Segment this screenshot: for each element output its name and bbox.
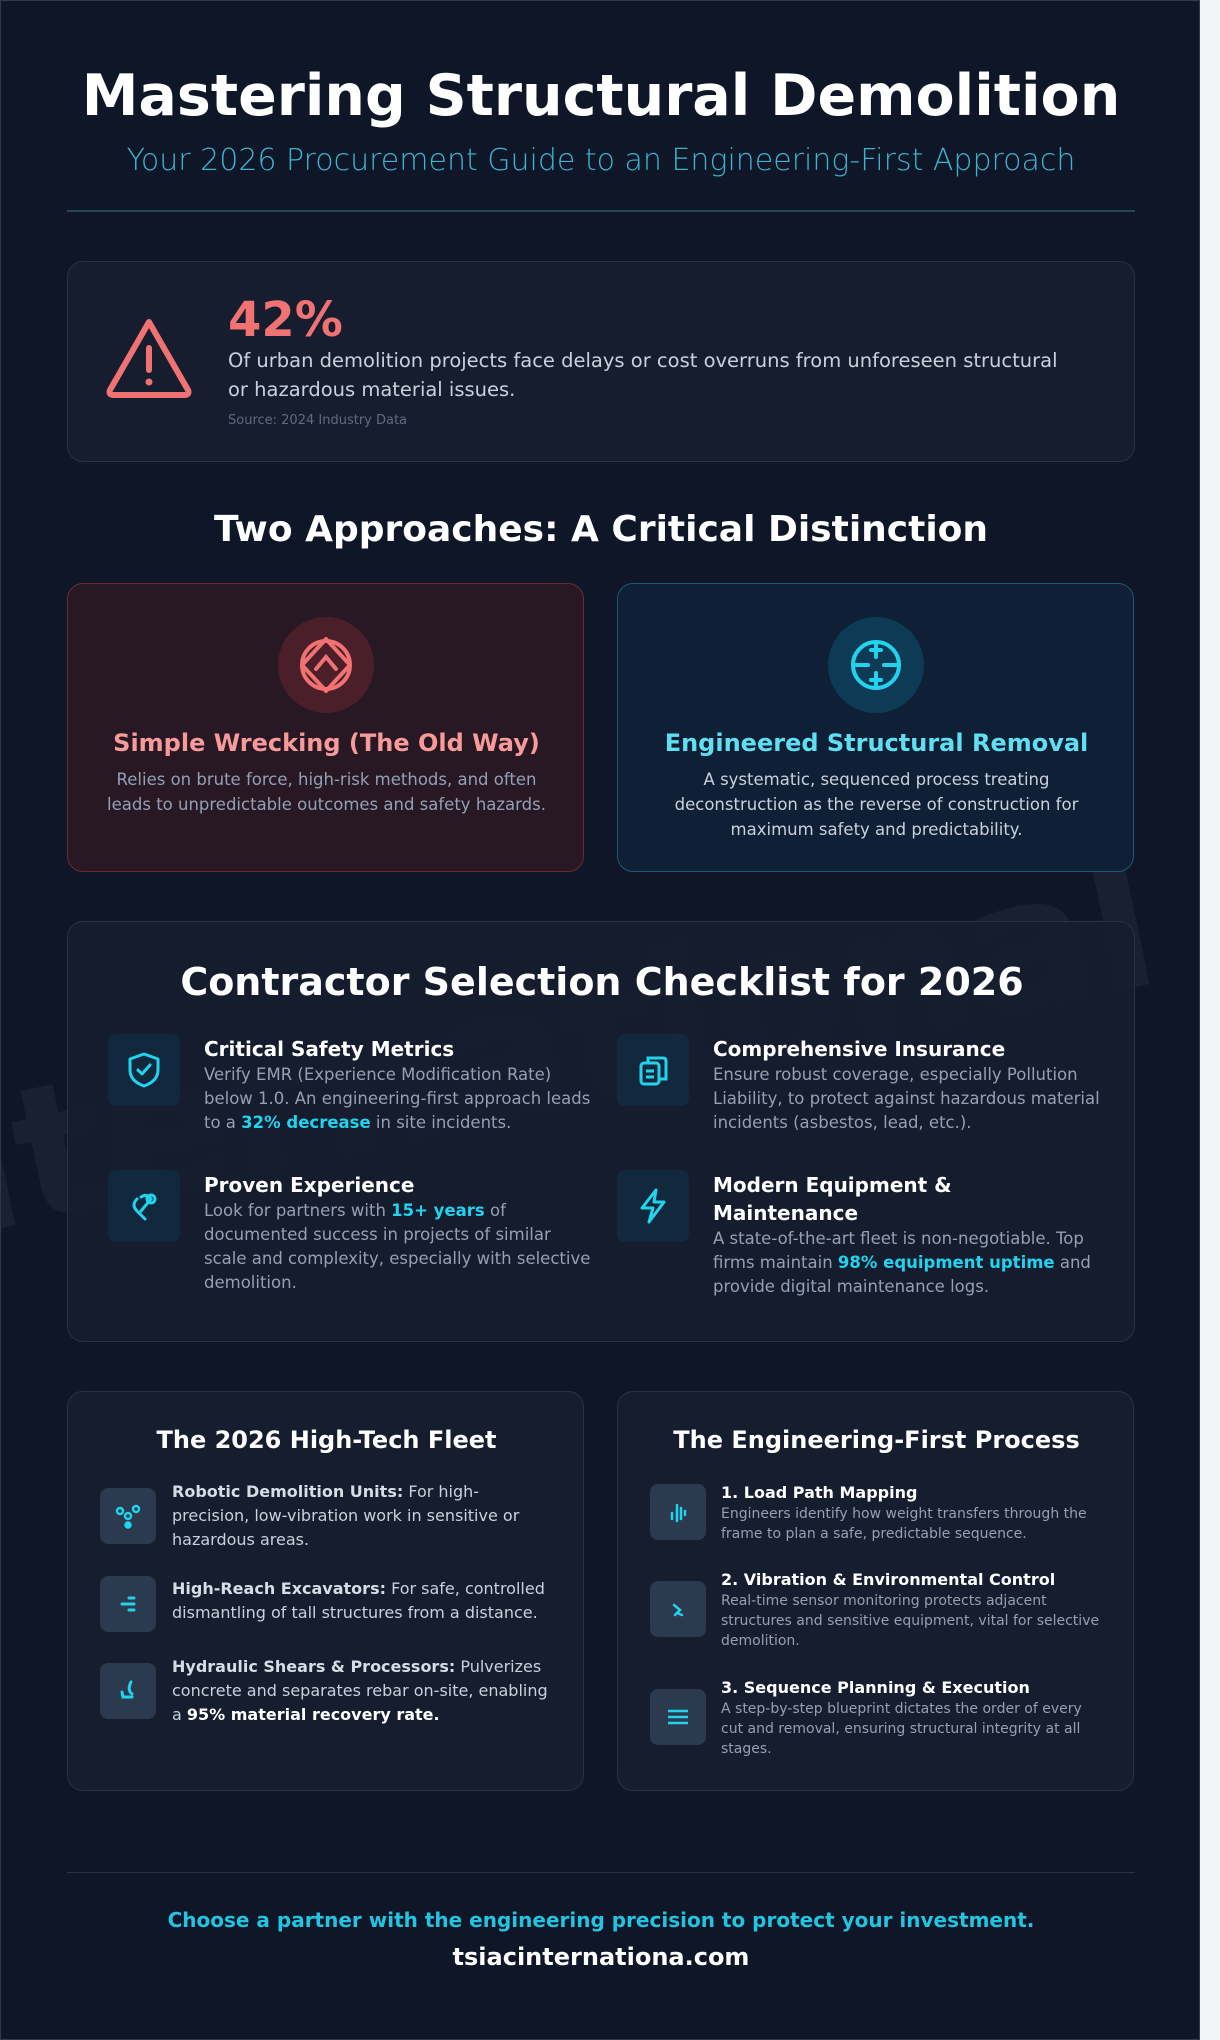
item: safety: Verify EMR (Experience Modification Rate) below 1.0. An engineering-first approach leads to a 32% decrease in site incidents. [204,1065,590,1132]
stat text: Of urban demolition projects face delays or cost overruns from unforeseen structural or hazardous material issues. [228,349,1057,401]
item: experience: Proven Experience [204,1173,414,1197]
subtitle: Your 2026 Procurement Guide to an Engineering-First Approach [127,143,1075,178]
item: insurance: Ensure robust coverage, especially Pollution Liability, to protect against hazardous material incidents (asbestos, lead, etc.). [713,1065,1100,1132]
item: shears: Hydraulic Shears & Processors: Pulverizes concrete and separates rebar on-site, enabling a 95% material recovery rate. [172,1657,548,1724]
icon: bolt [617,1170,689,1242]
icon: warning triangle [106,319,192,398]
card text: Relies on brute force, high-risk methods, and often leads to unpredictable outcomes and safety hazards. [107,770,546,814]
icon: vibration [650,1581,706,1637]
source: Source: 2024 Industry Data [228,413,407,428]
card title: Engineered Structural Removal [665,729,1088,757]
item: experience [108,1170,590,1292]
step 3: 3. Sequence Planning & Execution [721,1678,1030,1697]
icon: robot [100,1488,156,1544]
footer CTA: Choose a partner with the engineering precision to protect your investment. [168,1908,1034,1932]
panel: fleet [67,1391,584,1791]
icon: shield [108,1034,180,1106]
panel: checklist [67,921,1135,1342]
panel: engineered removal [617,583,1134,872]
item: excavator [100,1576,545,1632]
item: equipment: A state-of-the-art fleet is non-negotiable. Top firms maintain 98% equipment uptime and provide digital maintenance logs. [713,1229,1091,1296]
panel: simple wrecking [67,583,584,872]
panel: process [617,1391,1134,1791]
step 1: 1. Load Path Mapping [721,1483,917,1502]
icon: load path [650,1484,706,1540]
item: safety: Critical Safety Metrics [204,1037,454,1061]
icon: sequence [650,1689,706,1745]
step 2: Real-time sensor monitoring protects adjacent structures and sensitive equipment, vital for selective demolition. [721,1593,1099,1649]
icon: clipboard [617,1034,689,1106]
item: robotic: Robotic Demolition Units: For high-precision, low-vibration work in sensitive or hazardous areas. [172,1482,519,1549]
item: experience: Look for partners with 15+ years of documented success in projects of similar scale and complexity, especially with selective demolition. [204,1201,590,1292]
item: safety [108,1034,590,1132]
footer url: tsiacinternationa.com [453,1943,749,1971]
step 1 [650,1483,1087,1542]
step 3: A step-by-step blueprint dictates the order of every cut and removal, ensuring structural integrity at all stages. [721,1701,1082,1757]
stat number: 42% [228,292,343,348]
heading: two approaches: Two Approaches: A Critical Distinction [214,509,988,550]
step 1: Engineers identify how weight transfers through the frame to plan a safe, predictable sequence. [721,1506,1087,1542]
step 2 [650,1570,1099,1649]
title: Mastering Structural Demolition [82,63,1120,129]
icon: crosshair [828,617,924,713]
icon: handshake [108,1170,180,1242]
card text: A systematic, sequenced process treating deconstruction as the reverse of construction for maximum safety and predictability. [675,770,1078,839]
step 3 [650,1678,1082,1757]
item: excavator: High-Reach Excavators: For safe, controlled dismantling of tall structures from a distance. [172,1579,545,1622]
step 2: 2. Vibration & Environmental Control [721,1570,1055,1589]
icon: wrecking [278,617,374,713]
card title: Simple Wrecking (The Old Way) [113,729,540,757]
fleet heading: The 2026 High-Tech Fleet [156,1426,497,1454]
item: insurance: Comprehensive Insurance [713,1037,1005,1061]
icon: excavator [100,1576,156,1632]
item: equipment: Modern Equipment & Maintenance [713,1173,952,1225]
checklist heading: Contractor Selection Checklist for 2026 [180,960,1024,1004]
icon: shears [100,1663,156,1719]
item: equipment [617,1170,1091,1296]
panel: stat card [67,261,1135,462]
process heading: The Engineering-First Process [673,1426,1080,1454]
item: insurance [617,1034,1100,1132]
